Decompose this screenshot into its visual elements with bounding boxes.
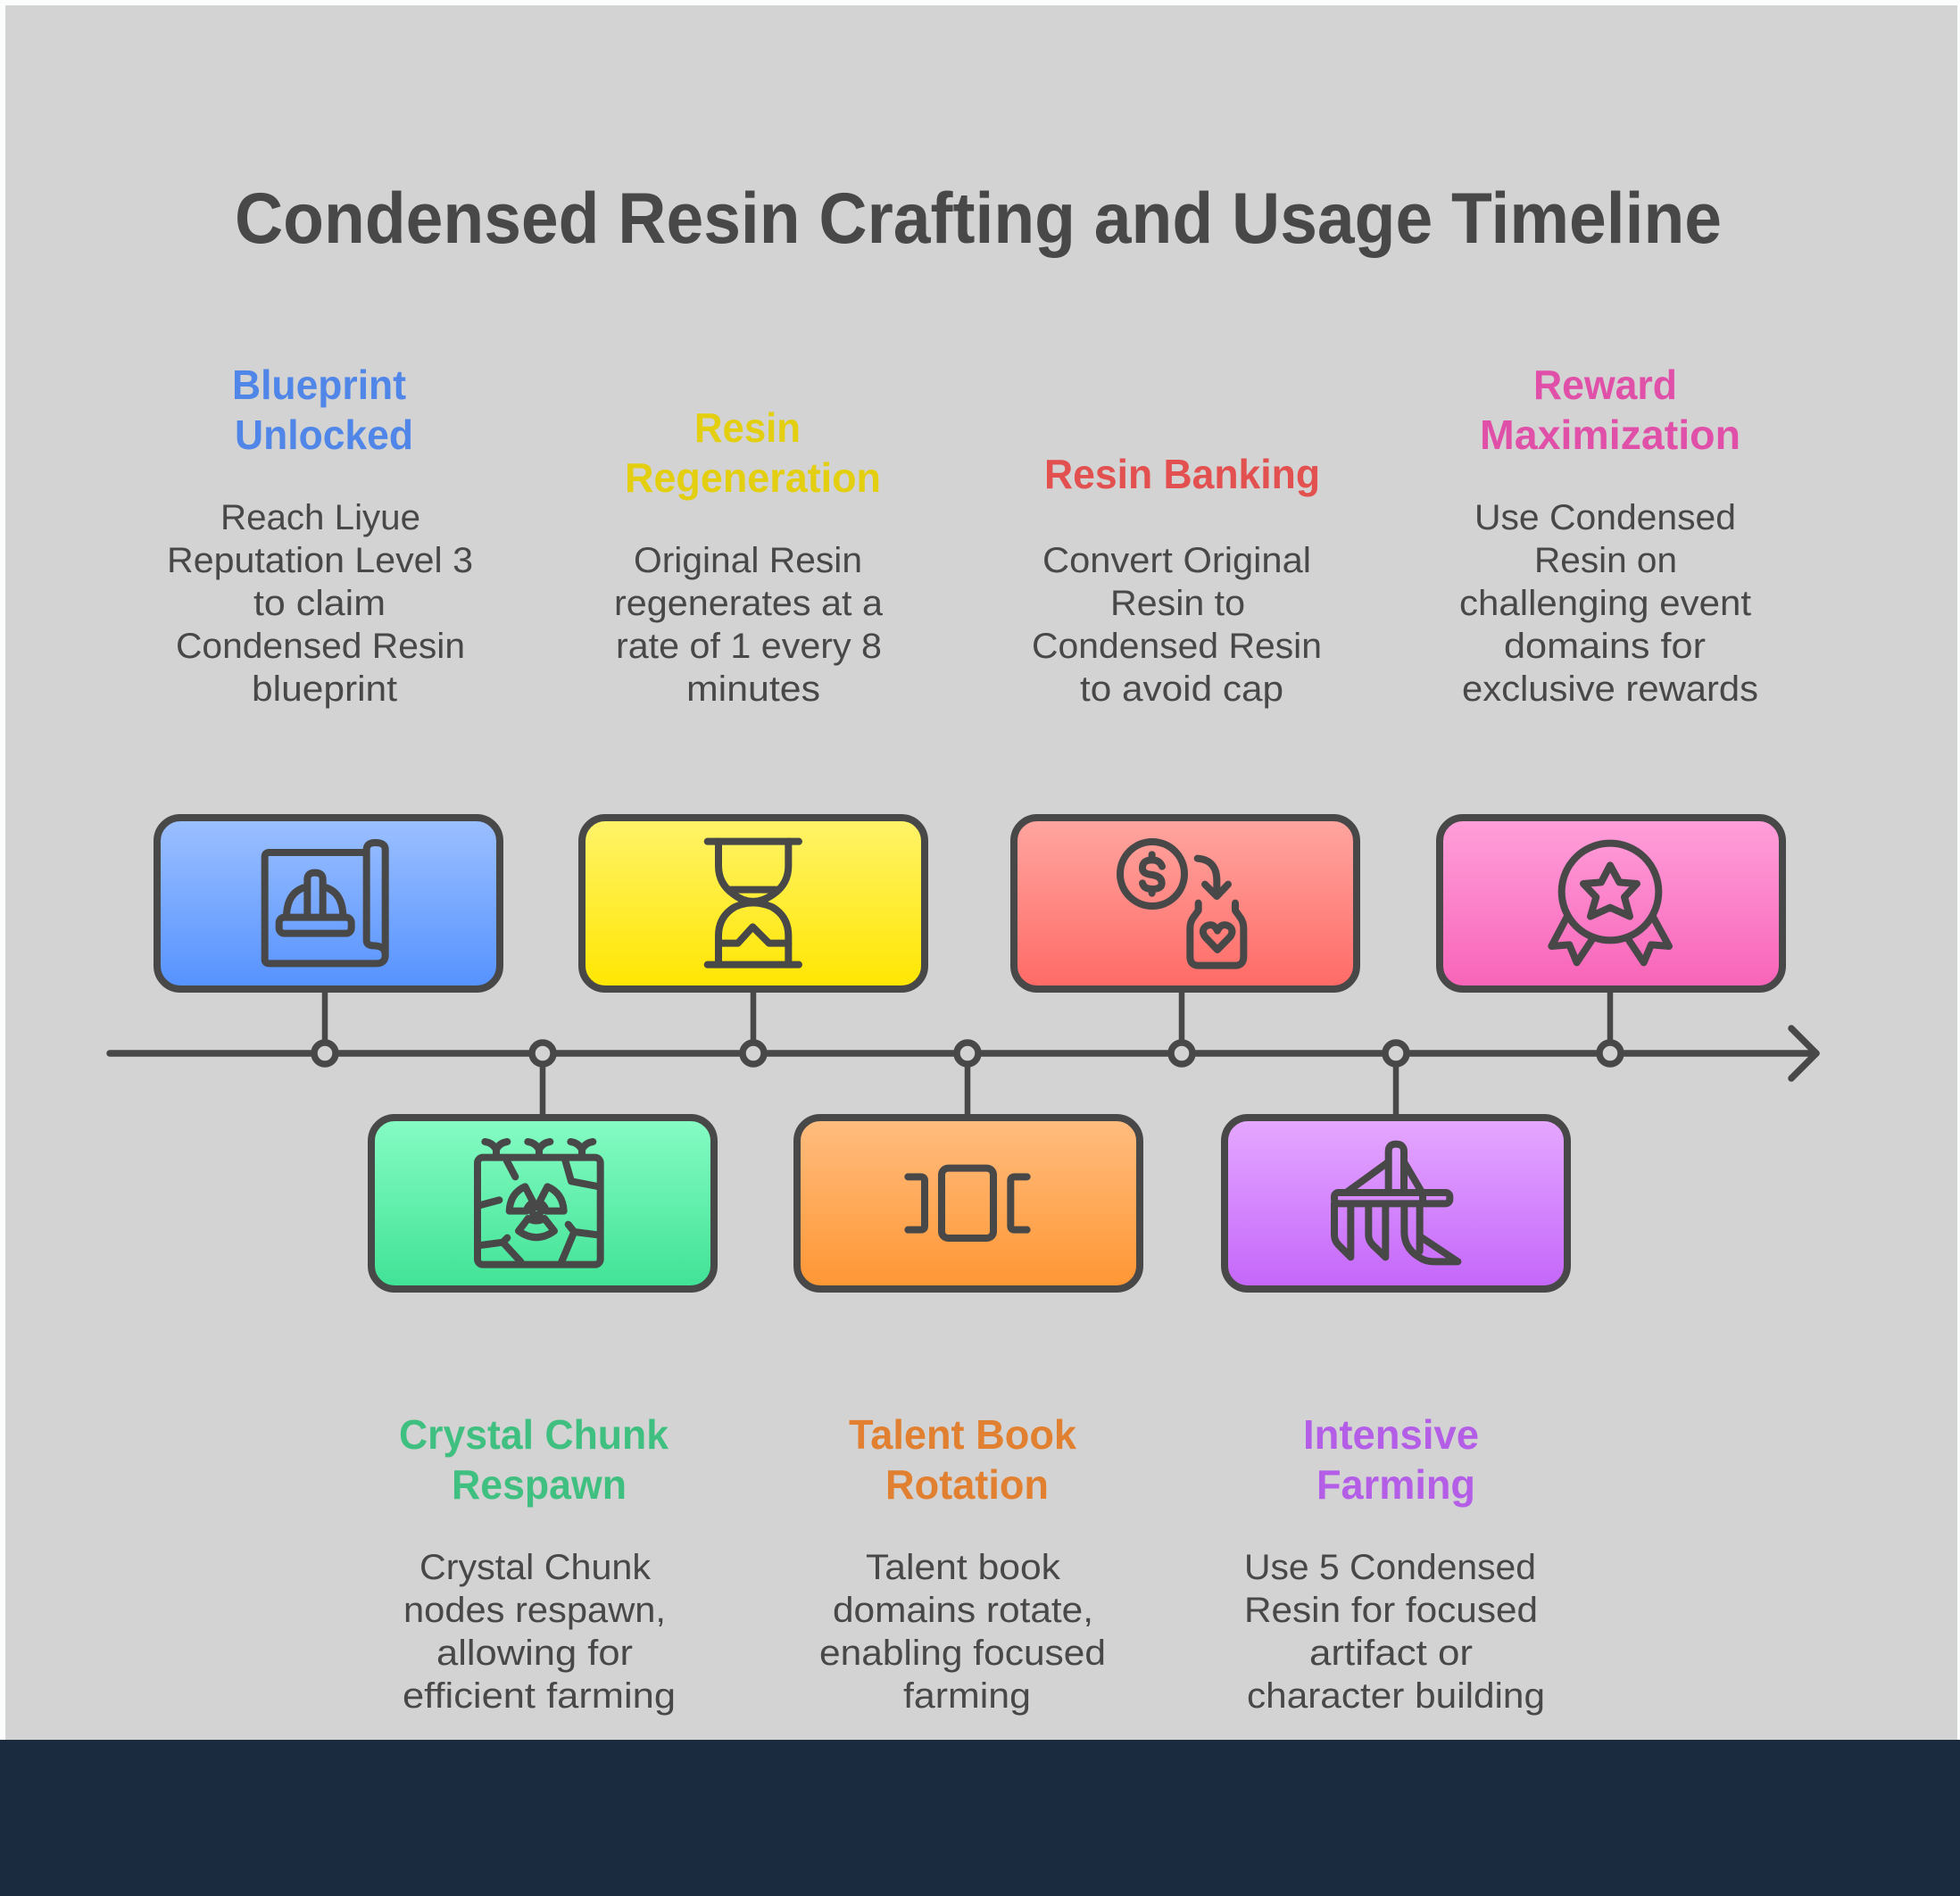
text block: Resin Regeneration — [614, 404, 884, 709]
description: Reward Maximization: challenging event — [1459, 584, 1751, 623]
description: Reward Maximization: exclusive rewards — [1462, 669, 1758, 709]
text block: Intensive Farming — [1244, 1411, 1545, 1716]
heading: Crystal Chunk Respawn: Respawn — [452, 1461, 627, 1508]
description: Talent Book Rotation: farming — [903, 1676, 1031, 1716]
footer band — [0, 1740, 1960, 1896]
text block: Crystal Chunk Respawn — [399, 1411, 676, 1716]
heading: Reward Maximization: Maximization — [1480, 412, 1740, 458]
heading: Talent Book Rotation: Talent Book — [849, 1411, 1076, 1458]
heading: Resin Regeneration: Resin — [694, 404, 801, 451]
description: Reward Maximization: Use Condensed — [1474, 498, 1736, 537]
description: Intensive Farming — [1244, 1548, 1545, 1716]
description: Resin Banking: to avoid cap — [1080, 669, 1283, 709]
icon: carousel — [908, 1168, 1027, 1238]
heading: Reward Maximization — [1480, 362, 1740, 458]
heading: Talent Book Rotation — [849, 1411, 1076, 1508]
heading: Intensive Farming — [1303, 1411, 1479, 1508]
icon: hourglass — [708, 842, 799, 965]
icon: award medal — [1551, 844, 1669, 962]
card: exchange — [1014, 818, 1357, 989]
description: Reward Maximization: Resin on — [1534, 541, 1677, 580]
description: Crystal Chunk Respawn: Crystal Chunk — [419, 1548, 652, 1587]
connectors — [325, 991, 1610, 1116]
icon: radioactive crate — [478, 1142, 601, 1265]
description: Reward Maximization: domains for — [1504, 627, 1706, 666]
description: Talent Book Rotation — [819, 1548, 1106, 1716]
heading: Resin Regeneration — [625, 404, 881, 501]
text block: Resin Banking — [1032, 451, 1322, 709]
description: Reward Maximization — [1459, 498, 1758, 709]
card: hourglass — [582, 818, 925, 989]
description: Intensive Farming: Resin for focused — [1244, 1591, 1538, 1630]
description: Resin Regeneration: rate of 1 every 8 — [616, 627, 882, 666]
card: talent book — [797, 1118, 1140, 1289]
heading: Talent Book Rotation: Rotation — [885, 1461, 1049, 1508]
description: Resin Banking: Convert Original — [1042, 541, 1311, 580]
description: Talent Book Rotation: domains rotate, — [833, 1591, 1093, 1630]
heading: Blueprint Unlocked — [232, 362, 413, 458]
icon: coin to jar — [1120, 842, 1243, 966]
heading: Blueprint Unlocked: Unlocked — [235, 412, 413, 458]
heading: Resin Banking: Resin Banking — [1044, 451, 1320, 497]
heading: Resin Regeneration: Regeneration — [625, 454, 881, 501]
description: Resin Regeneration: regenerates at a — [614, 584, 884, 623]
card: reward — [1440, 818, 1782, 989]
heading: Blueprint Unlocked: Blueprint — [232, 362, 406, 408]
description: Blueprint Unlocked — [167, 498, 473, 709]
title: Condensed Resin Crafting and Usage Timeline — [235, 179, 1722, 259]
description: Blueprint Unlocked: blueprint — [252, 669, 397, 709]
description: Blueprint Unlocked: to claim — [253, 584, 386, 623]
description: Talent Book Rotation: enabling focused — [819, 1634, 1106, 1673]
description: Crystal Chunk Respawn: nodes respawn, — [403, 1591, 666, 1630]
description: Talent Book Rotation: Talent book — [866, 1548, 1061, 1587]
text block: Reward Maximization — [1459, 362, 1758, 709]
description: Resin Regeneration — [614, 541, 884, 709]
text block: Talent Book Rotation — [819, 1411, 1106, 1716]
description: Blueprint Unlocked: Reputation Level 3 — [167, 541, 473, 580]
icon: blueprint with hard hat — [265, 843, 386, 963]
heading: Intensive Farming: Intensive — [1303, 1411, 1479, 1458]
description: Intensive Farming: artifact or — [1309, 1634, 1473, 1673]
description: Resin Banking: Condensed Resin — [1032, 627, 1322, 666]
text block: Blueprint Unlocked — [167, 362, 473, 709]
card: blueprint — [157, 818, 500, 989]
description: Crystal Chunk Respawn: efficient farming — [403, 1676, 676, 1716]
timeline nodes — [314, 1043, 1621, 1064]
heading: Intensive Farming: Farming — [1316, 1461, 1475, 1508]
description: Blueprint Unlocked: Reach Liyue — [220, 498, 420, 537]
description: Intensive Farming: Use 5 Condensed — [1244, 1548, 1536, 1587]
description: Crystal Chunk Respawn — [403, 1548, 676, 1716]
card: crystal chunk — [371, 1118, 714, 1289]
icon: plow — [1334, 1144, 1458, 1261]
description: Crystal Chunk Respawn: allowing for — [436, 1634, 633, 1673]
heading: Reward Maximization: Reward — [1533, 362, 1677, 408]
card: intensive farming — [1225, 1118, 1567, 1289]
description: Resin Regeneration: minutes — [686, 669, 820, 709]
description: Blueprint Unlocked: Condensed Resin — [176, 627, 465, 666]
heading: Crystal Chunk Respawn — [399, 1411, 669, 1508]
description: Intensive Farming: character building — [1247, 1676, 1545, 1716]
description: Resin Regeneration: Original Resin — [634, 541, 862, 580]
timeline axis with arrow — [110, 1028, 1816, 1078]
description: Resin Banking: Resin to — [1110, 584, 1245, 623]
description: Resin Banking — [1032, 541, 1322, 709]
heading: Crystal Chunk Respawn: Crystal Chunk — [399, 1411, 669, 1458]
